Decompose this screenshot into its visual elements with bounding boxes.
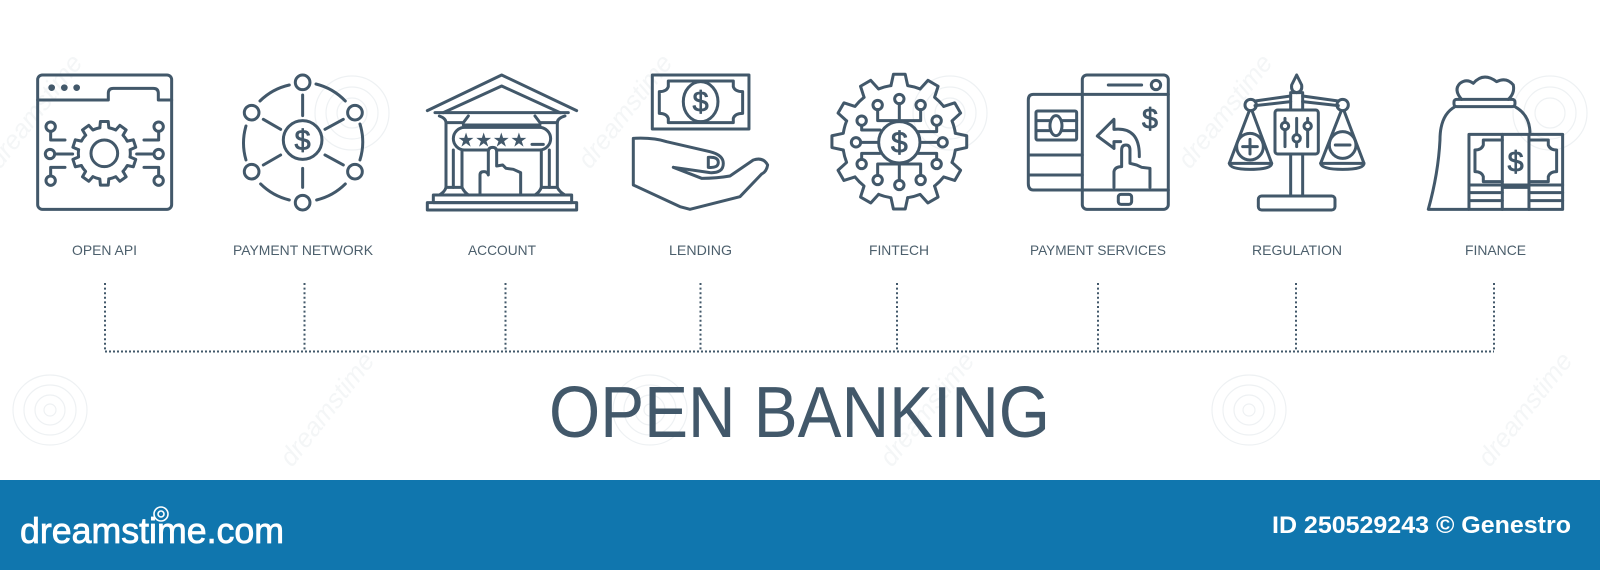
label: regulation: REGULATION xyxy=(1252,242,1342,258)
icon: payment services: $ xyxy=(1142,104,1158,136)
icon: payment services xyxy=(1028,75,1168,209)
icon: payment network: $ xyxy=(295,125,311,157)
watermark pattern: dreamstime xyxy=(1471,346,1578,472)
icon: open api xyxy=(38,75,172,209)
watermark pattern: dreamstime xyxy=(873,346,980,472)
icon: finance money bag xyxy=(1428,77,1563,209)
icon: lending hand: $ xyxy=(693,87,709,119)
footer bar: dreamstime.com xyxy=(20,510,284,551)
title: OPEN BANKING xyxy=(549,373,1050,453)
footer bar: ID 250529243 © Genestro xyxy=(1272,512,1571,539)
icon: account bank xyxy=(427,75,577,210)
dotted connector tree xyxy=(105,283,1494,352)
label: open api: OPEN API xyxy=(72,242,137,258)
icon: lending hand xyxy=(633,75,768,209)
watermark pattern: dreamstime xyxy=(1171,48,1278,174)
watermark pattern: dreamstime xyxy=(273,346,380,472)
watermark pattern xyxy=(0,48,1587,472)
label: account: ACCOUNT xyxy=(468,242,536,258)
watermark pattern: dreamstime xyxy=(571,48,678,174)
icon: fintech gear: $ xyxy=(891,127,908,160)
label: payment network: PAYMENT NETWORK xyxy=(233,242,374,258)
icon: finance money bag: $ xyxy=(1508,147,1524,179)
footer bar xyxy=(0,480,1600,570)
icon: payment network xyxy=(244,75,363,210)
label: lending: LENDING xyxy=(669,242,732,258)
icon: regulation scales xyxy=(1229,75,1364,210)
icon: fintech gear xyxy=(831,73,968,210)
label: finance: FINANCE xyxy=(1465,242,1526,258)
icon: account bank: ★★★★ xyxy=(457,129,528,152)
label: fintech: FINTECH xyxy=(869,242,929,258)
label: payment services: PAYMENT SERVICES xyxy=(1030,242,1166,258)
